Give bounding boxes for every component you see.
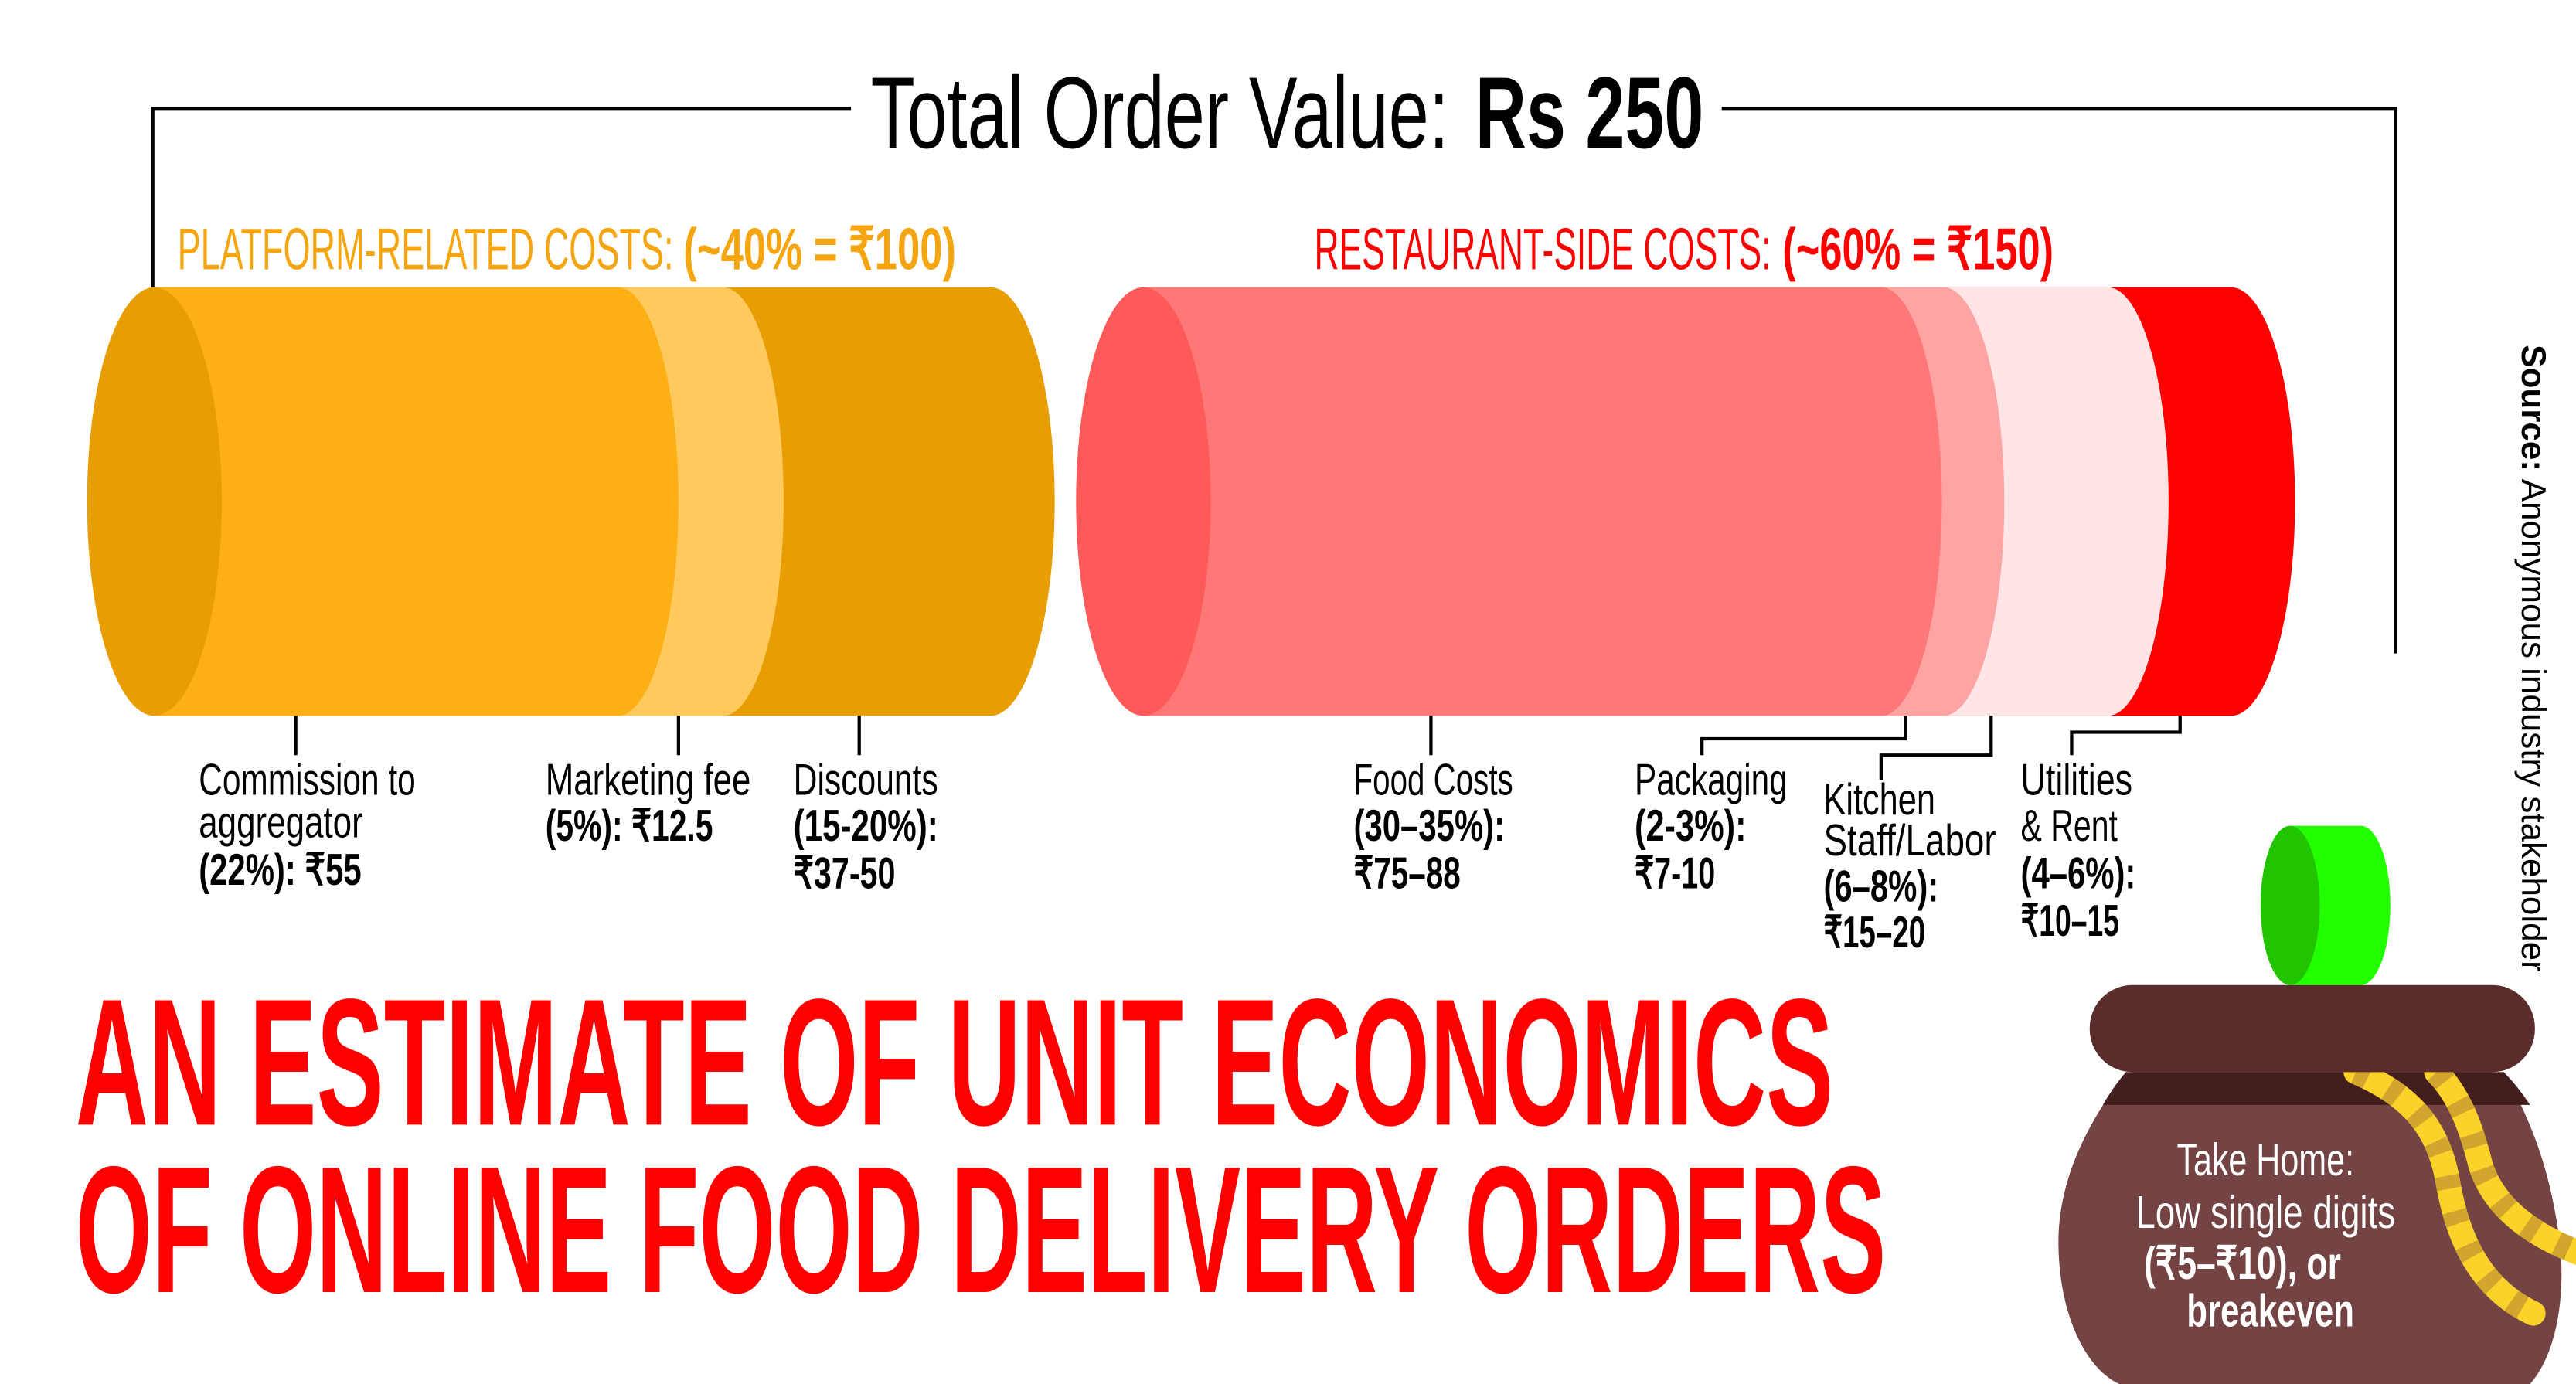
source: Source: Anonymous industry stakeholder — [2514, 345, 2552, 972]
label: kitchen staff: Staff/Labor — [1823, 816, 1996, 865]
heading: restaurant costs: (~60% = ₹150) — [1782, 216, 2054, 282]
label: commission: (22%): ₹55 — [199, 845, 362, 895]
leader lines — [296, 716, 2180, 780]
label: utilities: (4–6%): — [2021, 848, 2135, 898]
label: food costs — [1354, 755, 1513, 898]
heading: platform costs: PLATFORM-RELATED COSTS: — [178, 216, 674, 282]
label: commission: aggregator — [199, 798, 363, 848]
label: packaging — [1635, 755, 1788, 898]
label: utilities: & Rent — [2021, 801, 2118, 851]
label: discounts: Discounts — [794, 755, 938, 804]
main title — [76, 961, 1886, 1331]
label: packaging: Packaging — [1635, 755, 1788, 804]
label: utilities: ₹10–15 — [2021, 896, 2119, 946]
label: packaging: (2-3%): — [1635, 801, 1747, 851]
label: utilities — [2021, 755, 2135, 946]
label: marketing fee: Marketing fee — [546, 755, 750, 804]
label: packaging: ₹7-10 — [1635, 848, 1715, 898]
pot text: Low single digits — [2135, 1186, 2395, 1238]
label: discounts: ₹37-50 — [794, 848, 895, 898]
pot body — [2058, 1072, 2561, 1384]
label: food costs: Food Costs — [1354, 755, 1513, 804]
pot text: (₹5–₹10), or — [2144, 1237, 2341, 1289]
pot lid — [2090, 985, 2535, 1072]
label: utilities: Utilities — [2021, 755, 2132, 804]
label: commission: Commission to — [199, 755, 416, 804]
label: marketing fee — [546, 755, 750, 851]
cylinder: restaurant costs — [1076, 287, 2295, 716]
label: marketing fee: (5%): ₹12.5 — [546, 801, 713, 851]
label: food costs: ₹75–88 — [1354, 848, 1461, 898]
bracket: total order value — [153, 108, 2395, 654]
pot text: breakeven — [2186, 1285, 2354, 1337]
title: total order value: Total Order Value: — [871, 56, 1449, 169]
pot text — [2135, 1134, 2395, 1337]
label: kitchen staff — [1823, 775, 1996, 957]
title: total order value: Rs 250 — [1475, 56, 1703, 169]
label: commission — [199, 755, 416, 895]
heading: platform costs: (~40% = ₹100) — [683, 216, 956, 282]
heading: restaurant costs: RESTAURANT-SIDE COSTS: — [1315, 216, 1771, 282]
label: kitchen staff: (6–8%): — [1823, 862, 1938, 911]
cylinder: platform costs — [87, 287, 1055, 716]
label: discounts — [794, 755, 938, 898]
icon: green coin — [2261, 826, 2391, 985]
chain — [2356, 1072, 2576, 1314]
label: kitchen staff: Kitchen — [1823, 775, 1935, 825]
pot text: Take Home: — [2176, 1134, 2354, 1185]
label: kitchen staff: ₹15–20 — [1823, 908, 1925, 957]
label: discounts: (15-20%): — [794, 801, 938, 851]
icon: money pot — [2058, 826, 2576, 1384]
label: food costs: (30–35%): — [1354, 801, 1505, 851]
